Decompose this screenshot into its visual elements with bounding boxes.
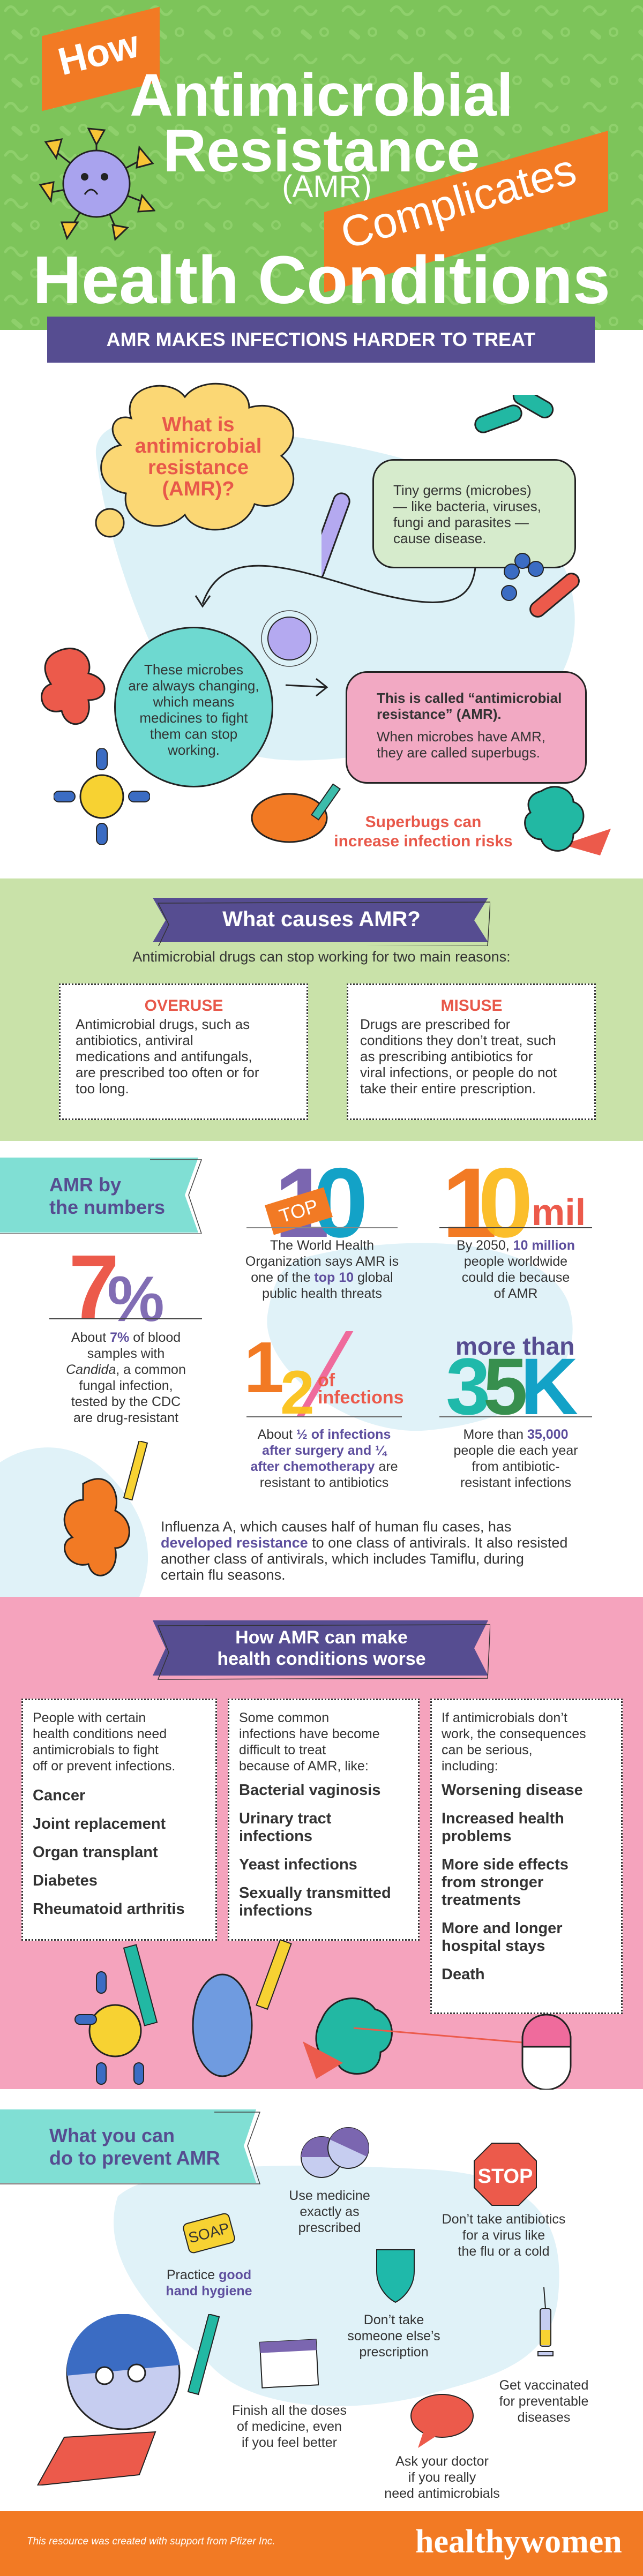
item: calendar: of medicine, even (237, 2419, 342, 2434)
item: speech bubble (384, 2394, 500, 2501)
item: use medicine: exactly as (300, 2204, 360, 2219)
item: calendar: Finish all the doses (232, 2403, 347, 2418)
panel: misuse: MISUSE (440, 997, 503, 1015)
section: prevent AMR (0, 2109, 588, 2501)
item: use medicine: Use medicine (289, 2188, 370, 2203)
item: shield: someone else’s (347, 2329, 440, 2344)
icon: red blob microbe (41, 648, 105, 725)
stat: half of infections: after chemotherapy are (250, 1459, 398, 1474)
panel: health conditions: health conditions need (33, 1726, 167, 1741)
icon: yellow sun microbe (54, 748, 150, 845)
section: how AMR makes conditions worse (0, 1597, 643, 2089)
item: soap (166, 2213, 252, 2299)
oval: microbes are changing: medicines to fight (139, 710, 248, 726)
panel: health conditions: Rheumatoid arthritis (33, 1901, 185, 1918)
stat: 35K (439, 1332, 592, 1490)
panel: misuse: Drugs are prescribed for (360, 1016, 510, 1032)
item: shield (347, 2249, 440, 2360)
item: speech bubble: if you really (408, 2470, 476, 2485)
title tag: How (42, 7, 160, 111)
header: green title area (0, 0, 643, 330)
title tag: Complicates (324, 131, 608, 292)
panel: consequences: Worsening disease Increased health (442, 1782, 583, 1827)
panel: health conditions: off or prevent infections. (33, 1759, 175, 1774)
stat: 10 million: 0 (478, 1148, 533, 1258)
text: influenza A (161, 1519, 567, 1583)
ribbon: AMR by the numbers (0, 1158, 202, 1234)
item: stop sign: Don’t take antibiotics (442, 2212, 565, 2227)
stat: half of infections: of (318, 1370, 335, 1391)
text box: this is called AMR: resistance” (AMR). (377, 706, 502, 722)
text box: this is called AMR: This is called “antimicrobial (377, 690, 562, 706)
text: influenza A: certain flu seasons. (161, 1567, 286, 1583)
banner: how AMR can make health conditions worse: health conditions worse (217, 1649, 426, 1669)
stat: 7%: fungal infection, (79, 1378, 173, 1393)
icon: superhero pill (36, 2314, 220, 2485)
stat: 10 million: could die because (462, 1270, 570, 1285)
icon: orange microbe with sword (63, 1441, 148, 1576)
callout: superbugs increase risk (334, 813, 513, 850)
stat: 35K: 35K (446, 1341, 571, 1431)
stat: top 10: 1 (274, 1148, 330, 1258)
panel: misuse: take their entire prescription. (360, 1080, 536, 1097)
stat: 7%: About 7% of blood (71, 1330, 181, 1345)
stat: half of infections (244, 1327, 404, 1490)
background blob (96, 427, 575, 761)
panel: health conditions (21, 1699, 217, 1941)
panel: overuse: antibiotics, antiviral (76, 1032, 193, 1048)
stat: half of infections: infections (318, 1387, 404, 1408)
item: shield: Don’t take (364, 2312, 424, 2327)
oval: microbes are changing: them can stop (150, 726, 237, 742)
background pattern (4, 5, 643, 329)
stat: 10 million: 1 (442, 1148, 497, 1258)
panel: common infections: because of AMR, like: (239, 1759, 369, 1774)
logo: healthywomen: healthywomen (415, 2524, 622, 2560)
oval: microbes are changing: These microbes (144, 662, 243, 678)
panel: common infections: infections Yeast infections Sexually transmitted (239, 1828, 391, 1902)
icon: green superbug (524, 786, 611, 855)
stat: half of infections: About ½ of infections (258, 1427, 391, 1442)
stat: top 10: 0 (313, 1148, 368, 1258)
subtitle: Antimicrobial drugs can stop working for two main reasons: (132, 949, 511, 965)
callout: superbugs increase risk: Superbugs can (365, 813, 481, 831)
panel: overuse (59, 983, 308, 1120)
illustration: microbe characters (74, 1940, 571, 2090)
text box: tiny germs: cause disease. (393, 530, 486, 546)
stat: 7%: 7 (69, 1236, 119, 1338)
banner: how AMR can make health conditions worse (153, 1620, 490, 1680)
stat: 35K: More than 35,000 (463, 1427, 568, 1442)
item: speech bubble: need antimicrobials (384, 2486, 500, 2501)
panel: common infections: Some common (239, 1710, 329, 1725)
stat: top 10: TOP (276, 1195, 320, 1227)
ribbon: AMR by the numbers: AMR by (49, 1174, 121, 1196)
text box: tiny germs: — like bacteria, viruses, (393, 498, 541, 514)
stat: half of infections: 2 (280, 1358, 315, 1427)
item: use medicine: prescribed (298, 2220, 361, 2235)
item: calendar (232, 2339, 347, 2450)
item: calendar: if you feel better (242, 2435, 337, 2450)
panel: misuse: viral infections, or people do not (360, 1064, 557, 1080)
panel: consequences: treatments More and longer (442, 1891, 563, 1937)
item: syringe: Get vaccinated (499, 2378, 588, 2393)
section: what causes AMR (0, 878, 643, 1141)
stat: 7%: Candida, a common (66, 1362, 186, 1377)
arrow curve (203, 555, 476, 604)
panel: common infections: Bacterial vaginosis Urinary tract (239, 1782, 380, 1827)
title: Antimicrobial Resistance: Antimicrobial (130, 62, 513, 129)
panel: overuse: OVERUSE (145, 997, 223, 1015)
oval: microbes are changing (114, 627, 273, 787)
panel: common infections: infections (239, 1902, 312, 1919)
panel: health conditions: Organ transplant (33, 1844, 158, 1861)
panel: health conditions: antimicrobials to fight (33, 1743, 159, 1758)
stat: 7% (49, 1236, 202, 1425)
panel: consequences (430, 1699, 623, 2014)
panel: overuse: too long. (76, 1080, 129, 1097)
item: use medicine (289, 2127, 370, 2235)
cloud: what is AMR (95, 382, 295, 538)
panel: health conditions: Joint replacement (33, 1815, 166, 1833)
oval: microbes are changing: which means (153, 694, 234, 710)
stat: top 10: Organization says AMR is (245, 1254, 399, 1269)
text box: tiny germs: Tiny germs (microbes) (393, 482, 532, 498)
text box: tiny germs (372, 459, 576, 568)
text box: tiny germs: fungi and parasites — (393, 514, 529, 530)
item: syringe: for preventable (499, 2394, 588, 2409)
panel: overuse: are prescribed too often or for (76, 1064, 259, 1080)
background blobs (0, 1243, 573, 1597)
panel: misuse: as prescribing antibiotics for (360, 1048, 533, 1064)
text box: this is called AMR: When microbes have AMR, (377, 729, 545, 745)
stat: 10 million: people worldwide (464, 1254, 567, 1269)
panel: common infections (228, 1699, 420, 1941)
stat: top 10: public health threats (262, 1286, 382, 1301)
item: syringe (499, 2287, 588, 2425)
section: prevent AMR: diseases (518, 2410, 570, 2425)
text: influenza A: Influenza A, which causes half of human flu cases, has (161, 1519, 511, 1535)
ribbon: what you can do (0, 2109, 260, 2184)
footer (0, 2511, 643, 2576)
stat: half of infections: resistant to antibiotics (260, 1475, 388, 1490)
cloud: what is AMR: What is antimicrobial resistance (AMR)? (135, 414, 261, 500)
stat: half of infections: after surgery and ¼ (262, 1443, 386, 1458)
footer credit: This resource was created with support from Pfizer Inc. (27, 2536, 275, 2547)
stat: top 10: The World Health (270, 1238, 374, 1253)
stat: 35K: from antibiotic- (472, 1459, 559, 1474)
text: influenza A: another class of antivirals, which includes Tamiflu, during (161, 1551, 524, 1567)
stat: top 10 (245, 1148, 399, 1301)
stat: 7%: % (107, 1263, 165, 1335)
item: shield: prescription (359, 2345, 429, 2360)
panel: common infections: difficult to treat (239, 1743, 326, 1758)
oval: microbes are changing: are always changing, (128, 678, 259, 694)
panel: consequences: from stronger (442, 1874, 543, 1891)
item: speech bubble: Ask your doctor (395, 2454, 489, 2469)
stat: 10 million: By 2050, 10 million (457, 1238, 575, 1253)
panel: misuse (347, 983, 596, 1120)
stat: 7%: samples with (87, 1346, 165, 1361)
stat: 10 million (439, 1148, 592, 1301)
panel: overuse: medications and antifungals, (76, 1048, 252, 1064)
icon: purple scribble microbe (261, 610, 318, 667)
item: soap: SOAP (186, 2219, 231, 2247)
banner: AMR makes infections harder to treat (47, 317, 595, 363)
text: influenza A: developed resistance to one class of antivirals. It also resisted (161, 1535, 567, 1551)
panel: consequences: hospital stays Death (442, 1937, 545, 1983)
panel: consequences: problems More side effects (442, 1828, 569, 1873)
icon: sad virus (39, 127, 155, 241)
callout: superbugs increase risk: increase infection risks (334, 832, 513, 850)
header: green title area: Resistance (163, 117, 480, 184)
item: stop sign: STOP (478, 2165, 533, 2188)
panel: consequences: work, the consequences (442, 1726, 586, 1741)
icon: orange bean microbe (251, 783, 341, 843)
ribbon: what you can do: do to prevent AMR (49, 2147, 220, 2169)
item: soap: Practice good (167, 2267, 251, 2282)
ribbon: AMR by the numbers: the numbers (49, 1196, 165, 1218)
panel: consequences: If antimicrobials don’t (442, 1710, 567, 1725)
title: Health Conditions: Health Conditions (33, 242, 610, 318)
section: AMR by the numbers (0, 1148, 592, 1597)
stat: 10 million: mil (532, 1191, 586, 1233)
banner: AMR makes infections harder to treat: AMR MAKES INFECTIONS HARDER TO TREAT (107, 328, 535, 350)
background blob (114, 2166, 559, 2406)
stat: half of infections: 1 (244, 1327, 284, 1408)
panel: health conditions: Cancer (33, 1787, 85, 1804)
text box: this is called AMR (346, 671, 587, 784)
stat: 35K: people die each year (453, 1443, 578, 1458)
stat: 7%: tested by the CDC (71, 1394, 181, 1409)
icon: bacteria cluster (322, 395, 580, 618)
panel: health conditions: People with certain (33, 1710, 146, 1725)
ribbon: what you can do: What you can (49, 2124, 175, 2146)
header: green title area: Complicates (335, 145, 581, 258)
section: what is AMR (41, 382, 611, 855)
panel: health conditions: Diabetes (33, 1872, 98, 1889)
item: stop sign (442, 2143, 565, 2259)
panel: common infections: infections have become (239, 1726, 380, 1741)
panel: consequences: can be serious, (442, 1743, 533, 1758)
item: stop sign: for a virus like (462, 2228, 545, 2243)
item: stop sign: the flu or a cold (458, 2244, 549, 2259)
stat: 10 million: of AMR (494, 1286, 537, 1301)
header: green title area: How (54, 22, 143, 84)
stat: 35K: resistant infections (460, 1475, 571, 1490)
banner: how AMR can make health conditions worse: How AMR can make (235, 1627, 408, 1648)
stat: 7%: are drug-resistant (73, 1410, 178, 1425)
item: soap: hand hygiene (166, 2284, 252, 2299)
panel: consequences: including: (442, 1759, 498, 1774)
text box: this is called AMR: they are called superbugs. (377, 745, 540, 761)
banner: what causes AMR (153, 898, 490, 946)
stat: top 10: one of the top 10 global (251, 1270, 393, 1285)
panel: overuse: Antimicrobial drugs, such as (76, 1016, 250, 1032)
stat: 35K: more than (455, 1332, 574, 1360)
panel: misuse: conditions they don’t treat, such (360, 1032, 556, 1048)
oval: microbes are changing: working. (168, 742, 220, 758)
title: (AMR): (AMR) (282, 169, 372, 204)
banner: what causes AMR: What causes AMR? (222, 907, 421, 931)
